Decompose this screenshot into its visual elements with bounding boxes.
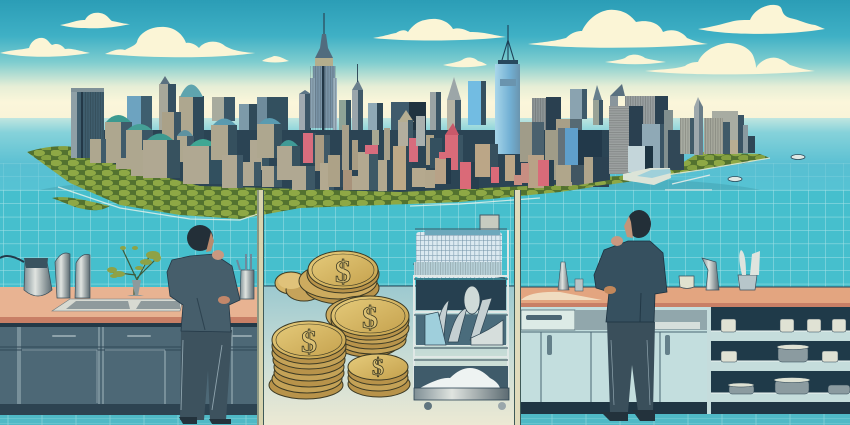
- water: [0, 118, 850, 198]
- small islet: [52, 197, 110, 210]
- outlet: [480, 215, 499, 232]
- left dark tower: [71, 88, 104, 158]
- head: [627, 210, 651, 238]
- toe kick: [521, 402, 850, 414]
- coin stack two: [326, 296, 409, 357]
- shoes: [601, 410, 655, 421]
- countertop: [0, 287, 258, 317]
- plates in rack: [425, 286, 503, 345]
- counter edge: [0, 317, 258, 324]
- faucets bottles: [55, 253, 90, 298]
- right group with obelisk: [680, 97, 755, 155]
- rack interior: [416, 280, 506, 310]
- man at right counter: [594, 210, 667, 421]
- counter items: [558, 250, 760, 291]
- dollar signs: [301, 253, 384, 381]
- open shelves: [707, 307, 850, 417]
- hands: [212, 250, 224, 260]
- dollar signs: $: [335, 253, 351, 289]
- sink: [52, 299, 183, 311]
- jacket: [594, 241, 667, 322]
- jacket: [167, 254, 240, 332]
- head: [187, 225, 213, 251]
- countertop: [521, 287, 850, 305]
- cart rails: [414, 230, 508, 395]
- kettle: [0, 256, 52, 296]
- floor: [0, 415, 258, 425]
- panel divider right: [514, 190, 521, 425]
- pink and tan buildings: [425, 123, 572, 189]
- skyline: [71, 13, 755, 208]
- glass rack: [413, 229, 507, 278]
- sky background: [0, 0, 850, 120]
- cabinets: [0, 327, 258, 404]
- water tile grid reflection: [0, 163, 850, 193]
- wheels: [424, 402, 432, 410]
- midtown right group: [520, 119, 609, 188]
- large striped tower and terminal: [609, 106, 684, 185]
- floor: [521, 414, 850, 425]
- panel: left kitchen: [0, 246, 258, 425]
- shoes: [179, 417, 231, 424]
- back coins: [275, 272, 322, 301]
- island: green shoreline: [27, 146, 770, 220]
- coin stack three: [269, 321, 346, 399]
- man at left counter: [167, 225, 240, 424]
- boats: [665, 154, 805, 190]
- back row buildings: [127, 64, 668, 154]
- toe kick: [0, 404, 258, 415]
- utensil canister: [237, 254, 254, 299]
- floor: [264, 286, 514, 425]
- coin stack four: [348, 354, 410, 397]
- dollar signs: $: [372, 355, 384, 381]
- trousers: [607, 322, 655, 412]
- trousers: [180, 330, 232, 420]
- clouds: [0, 5, 825, 74]
- one world trade center tower: [495, 25, 520, 154]
- lower skyline bushes: [200, 178, 622, 208]
- panel divider left: [257, 190, 264, 425]
- panel: middle coins and cart: [264, 215, 514, 425]
- cups: [721, 319, 846, 362]
- lower cabinets: [521, 307, 707, 402]
- panel: right kitchen: [521, 250, 850, 425]
- dark shadow mass behind centre blocks: [100, 130, 610, 192]
- dollar signs: $: [362, 299, 378, 335]
- empire state tower: [310, 13, 337, 130]
- distant shadow on water: [30, 173, 770, 217]
- central dense blocks: [303, 110, 434, 191]
- shoreline foam: [58, 158, 770, 220]
- bottom tray: [414, 366, 508, 390]
- dish cart: [413, 229, 509, 410]
- coin stack one: [299, 251, 379, 304]
- hands: [611, 236, 623, 246]
- plate stacks: [728, 344, 850, 394]
- dollar signs: $: [301, 323, 317, 359]
- left domed buildings: [90, 84, 315, 190]
- wall and kitchen panels start: tiles: [0, 190, 850, 290]
- plant in vase: [107, 246, 161, 296]
